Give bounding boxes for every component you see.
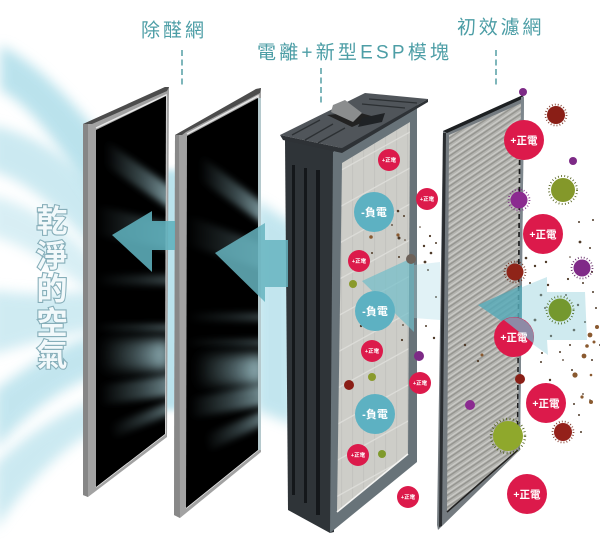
badge: positive small: +正電 (382, 157, 397, 164)
virus: purple (508, 190, 530, 210)
panel: formaldehyde filter 1 (83, 87, 175, 497)
virus: green large (491, 419, 525, 453)
dashed leader: 初效濾網 (495, 50, 497, 85)
badge: positive: +正電 (500, 332, 528, 344)
heading: 初效濾網: 初效濾網 (457, 16, 544, 38)
badge: negative (354, 192, 394, 232)
badge: positive small: +正電 (420, 196, 435, 203)
virus: small purple (569, 157, 577, 165)
virus: red (552, 422, 574, 442)
panel: ESP module (280, 93, 428, 533)
badge: positive (526, 383, 566, 423)
virus: purple (519, 88, 527, 96)
frame knob (406, 254, 416, 264)
arrow: through filter 1 (112, 211, 175, 272)
badge: negative: -負電 (362, 407, 388, 421)
positive charge badges (347, 120, 566, 514)
negative charge badges (354, 192, 395, 434)
badge: positive small (378, 149, 400, 171)
virus: dark red (546, 104, 566, 126)
virus: red small (344, 380, 354, 390)
virus: red small (515, 374, 525, 384)
debris particles (360, 210, 600, 433)
badge: positive small (348, 250, 370, 272)
badge: positive: +正電 (513, 489, 541, 501)
badge: positive small: +正電 (365, 348, 380, 355)
arrow: through ESP module (362, 257, 440, 332)
badge: positive small (361, 340, 383, 362)
wind streaks behind filters (0, 45, 295, 530)
badge: positive (504, 120, 544, 160)
brown debris (369, 233, 599, 404)
heading: 電離+新型ESP模塊: 電離+新型ESP模塊 (257, 42, 452, 64)
badge: negative: -負電 (362, 304, 388, 318)
badge: positive (523, 214, 563, 254)
badge: positive: +正電 (529, 229, 557, 241)
virus: olive small (368, 373, 376, 381)
module side face (285, 140, 334, 533)
module front frame (330, 103, 417, 533)
badge: positive: +正電 (532, 398, 560, 410)
light streaks in filter 1 (102, 147, 166, 434)
badge: positive small (347, 444, 369, 466)
vertical text: 乾淨的空氣: 氣 (36, 338, 68, 373)
virus: olive small (378, 450, 386, 458)
panel: pre-filter (437, 95, 524, 530)
heading: 除醛網: 除醛網 (141, 20, 207, 42)
dashed leader: ESP (320, 68, 322, 103)
vertical text: 乾淨的空氣: 空 (36, 306, 68, 341)
badge: positive small (416, 188, 438, 210)
virus: purple small (465, 400, 475, 410)
arrow: through filter 2 (215, 223, 288, 302)
badge: positive (494, 317, 534, 357)
module top cap (280, 93, 428, 148)
badge: negative (355, 291, 395, 331)
virus: olive (549, 176, 577, 204)
dashed leader: 除醛網 (181, 50, 183, 86)
panel: formaldehyde filter 2 (174, 88, 265, 518)
arrow: through pre-filter (478, 277, 587, 355)
badge: positive small: +正電 (413, 380, 428, 387)
badge: positive small (397, 486, 419, 508)
badge: positive (507, 474, 547, 514)
badge: positive small (409, 372, 431, 394)
vertical text: 乾淨的空氣: 淨 (36, 239, 68, 274)
badge: negative (355, 394, 395, 434)
light streaks in filter 2 (195, 162, 258, 448)
virus: red (504, 262, 526, 282)
virus: green (546, 296, 574, 324)
virus: purple (572, 258, 592, 278)
vertical text: 乾淨的空氣 (36, 204, 68, 373)
vertical text: 乾淨的空氣: 乾 (36, 204, 68, 239)
pleated filter face (337, 122, 410, 512)
badge: positive small: +正電 (351, 452, 366, 459)
virus: purple mid (414, 351, 424, 361)
badge: positive small: +正電 (352, 258, 367, 265)
vertical text: 乾淨的空氣: 的 (36, 272, 68, 307)
badge: positive: +正電 (510, 135, 538, 147)
viruses (344, 88, 592, 458)
badge: negative: -負電 (361, 205, 387, 219)
virus: olive small (349, 280, 357, 288)
badge: positive small: +正電 (401, 494, 416, 501)
